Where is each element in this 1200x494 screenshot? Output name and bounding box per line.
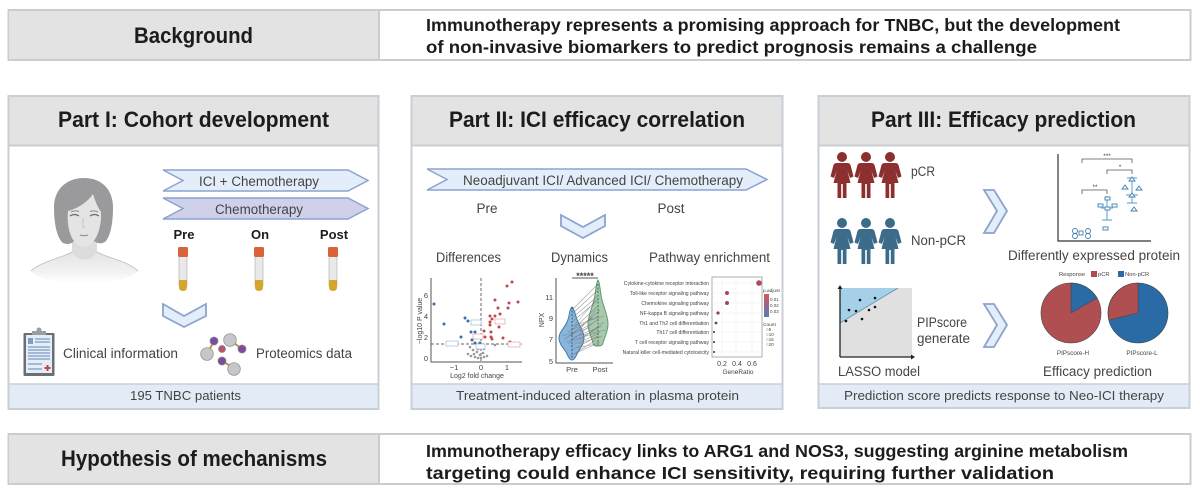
heading: hypothesis: Hypothesis of mechanisms: [61, 446, 327, 471]
legend: p.adjust and count: 0.03: [770, 309, 779, 314]
chart: pathway enrichment dot plot: Toll-like receptor signaling pathway: [630, 291, 709, 297]
text: hypothesis statement: targeting could enhance ICI sensitivity, requiring further validation: [426, 463, 1054, 483]
legend: p.adjust and count: p.adjust: [763, 288, 780, 294]
legend: response: Non-pCR: [1125, 272, 1149, 278]
heading: part I: Part I: Cohort development: [58, 107, 330, 132]
arrow: down chevron: [561, 215, 605, 238]
label: post: Post: [657, 201, 685, 216]
label: PIPscore generate: PIPscore: [917, 315, 967, 330]
icon: proteomics: [201, 334, 246, 375]
text: background statement: of non-invasive biomarkers to predict prognosis remains a challenge: [426, 37, 1037, 57]
chart: differently expressed protein scatter: *: [1119, 164, 1122, 171]
chart: pathway enrichment dot plot: Chemokine signaling pathway: [641, 301, 709, 307]
icons: pCR women: [830, 152, 902, 198]
legend: p.adjust and count: ○5: [766, 327, 772, 332]
chart: volcano plot: 0: [424, 354, 428, 363]
chart: volcano plot: [417, 278, 522, 380]
timepoint labels: [174, 227, 349, 242]
text: cohort footer: 195 TNBC patients: [130, 388, 241, 403]
chart: pathway enrichment dot plot: [623, 277, 780, 376]
heading: dynamics: Dynamics: [551, 250, 608, 265]
chart: violin plot: *****: [576, 271, 594, 281]
chart: pie PIPscore-L: [1108, 283, 1168, 343]
arrow: right chevron upper: [984, 190, 1007, 233]
icon: blood tube on: [254, 247, 264, 291]
icon: clipboard: [24, 328, 54, 376]
chart: violin plot: Post: [592, 365, 608, 374]
label: efficacy prediction: Efficacy prediction: [1043, 364, 1152, 379]
legend: p.adjust and count: ○15: [766, 337, 774, 342]
heading: part II: Part II: ICI efficacy correlation: [449, 107, 745, 132]
text: clinical information: Clinical information: [63, 346, 178, 361]
text: proteomics data: Proteomics data: [256, 346, 352, 361]
chart: differently expressed protein scatter: **: [1092, 184, 1098, 191]
heading: differences: Differences: [436, 250, 501, 265]
legend: response: [1059, 271, 1149, 278]
chart: pathway enrichment dot plot: NF-kappa B signaling pathway: [640, 311, 709, 317]
icon: blood tube pre: [178, 247, 188, 291]
text: background statement: Immunotherapy represents a promising approach for TNBC, but the development: [426, 15, 1120, 35]
text: treatment footer: Treatment-induced alteration in plasma protein: [456, 388, 739, 403]
chart: pie PIPscore-H: [1041, 283, 1101, 343]
timepoint labels: Pre: [174, 227, 194, 242]
panel: part III efficacy prediction: [818, 96, 1190, 408]
label: PIPscore generate: [917, 315, 970, 346]
label: LASSO model: LASSO model: [838, 364, 920, 379]
chart: pathway enrichment dot plot: GeneRatio: [722, 369, 754, 376]
label: pre: Pre: [476, 201, 498, 216]
legend: p.adjust and count: [763, 288, 780, 347]
chart: violin plot: 9: [549, 314, 553, 323]
arrow: chemotherapy: Chemotherapy: [215, 202, 303, 217]
icons: non-pCR women: [830, 218, 902, 264]
legend: response: Response: [1059, 272, 1085, 278]
panel: part I cohort development: [8, 96, 378, 409]
chart: volcano plot: 6: [424, 291, 428, 300]
heading: background: Background: [134, 23, 253, 48]
chart: pathway enrichment dot plot: 0.2: [717, 361, 727, 368]
chart: pathway enrichment dot plot: Th17 cell differentiation: [656, 330, 709, 336]
arrow: chemotherapy: [163, 198, 368, 219]
arrow: ICI + chemotherapy: ICI + Chemotherapy: [199, 174, 319, 189]
panel: part II ICI efficacy correlation: [412, 96, 782, 409]
chart: violin plot: Pre: [566, 365, 578, 374]
chart: violin plot: NPX: [539, 312, 546, 327]
icon: patient portrait: [31, 178, 138, 283]
text: hypothesis statement: Immunotherapy efficacy links to ARG1 and NOS3, suggesting arginine metabolism: [426, 441, 1128, 461]
chart: volcano plot: 1: [505, 363, 509, 372]
chart: violin plot: [539, 271, 613, 374]
legend: response: pCR: [1098, 272, 1110, 278]
label: differently expressed protein: Differently expressed protein: [1008, 248, 1180, 263]
chart: volcano plot: −1: [450, 363, 458, 372]
heading: part III: Part III: Efficacy prediction: [871, 107, 1136, 132]
panel: background: [8, 10, 1190, 60]
panel: hypothesis of mechanisms: [8, 434, 1190, 484]
chart: differently expressed protein scatter: ***: [1103, 153, 1111, 160]
chart: pathway enrichment dot plot: 0.6: [747, 361, 757, 368]
chart: pathway enrichment dot plot: 0.4: [732, 361, 742, 368]
heading: pathway enrichment: Pathway enrichment: [649, 250, 770, 265]
chart: violin plot: 5: [549, 357, 553, 366]
text: prediction footer: Prediction score predicts response to Neo-ICI therapy: [844, 388, 1165, 403]
chart: LASSO model: [838, 285, 915, 360]
arrow: down chevron: [163, 304, 206, 327]
text: hypothesis statement: [426, 441, 1128, 483]
chart: volcano plot: 0: [479, 363, 483, 372]
legend: p.adjust and count: ○10: [766, 332, 774, 337]
label: pCR: pCR: [911, 164, 935, 179]
arrow: right chevron lower: [984, 304, 1007, 347]
legend: p.adjust and count: Count: [763, 322, 776, 328]
chart: volcano plot: 2: [424, 333, 428, 342]
legend: p.adjust and count: 0.02: [770, 303, 779, 308]
chart: pathway enrichment dot plot: Th1 and Th2 cell differentiation: [639, 321, 709, 327]
legend: p.adjust and count: 0.01: [770, 297, 779, 302]
chart: pathway enrichment dot plot: Cytokine-cytokine receptor interaction: [624, 281, 709, 287]
chart: pathway enrichment dot plot: Natural killer cell-mediated cytotoxicity: [623, 350, 709, 356]
label: PIPscore generate: generate: [917, 331, 970, 346]
arrow: ICI + chemotherapy: [163, 170, 368, 191]
chart: volcano plot: 4: [424, 312, 428, 321]
chart: violin plot: 7: [549, 335, 553, 344]
timepoint labels: On: [251, 227, 269, 242]
chart: volcano plot: Log2 fold change: [450, 373, 504, 380]
legend: p.adjust and count: ○20: [766, 342, 774, 347]
arrow: treatment regimens: [427, 169, 767, 190]
arrow: treatment regimens: Neoadjuvant ICI/ Advanced ICI/ Chemotherapy: [463, 173, 743, 188]
chart: differently expressed protein scatter: [1058, 153, 1151, 241]
chart: pathway enrichment dot plot: T cell receptor signaling pathway: [635, 340, 709, 346]
label: PIPscore-H: PIPscore-H: [1057, 350, 1090, 357]
chart: violin plot: 11: [545, 293, 553, 302]
label: non-pCR: Non-pCR: [911, 233, 966, 248]
icon: blood tube post: [328, 247, 338, 291]
label: PIPscore-L: PIPscore-L: [1126, 350, 1158, 357]
timepoint labels: Post: [320, 227, 349, 242]
text: background statement: [426, 15, 1120, 57]
chart: volcano plot: −log10 P value: [417, 298, 424, 344]
